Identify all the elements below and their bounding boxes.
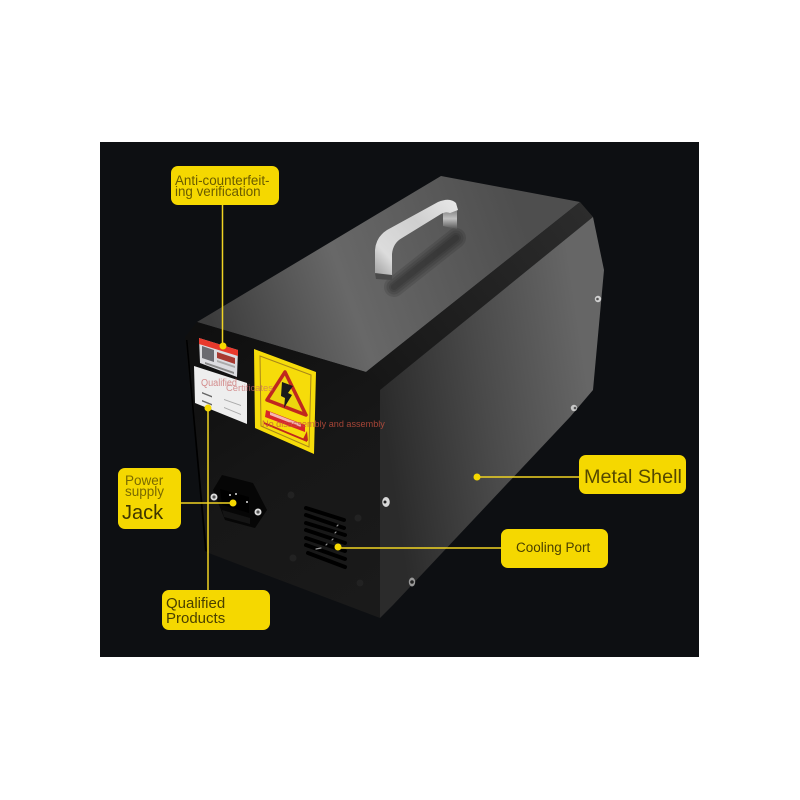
- front face rivets: [288, 492, 364, 586]
- high voltage warning sticker: [254, 349, 316, 454]
- dark background panel: [100, 142, 699, 657]
- callout: Metal Shell: [474, 455, 686, 494]
- callout: Cooling Port: Cooling Port: [516, 540, 591, 555]
- handle strut: [443, 206, 457, 229]
- box side face: [380, 217, 604, 618]
- power socket: [210, 475, 267, 528]
- warning red band: [265, 410, 305, 432]
- anti-counterfeit sticker: [199, 338, 238, 377]
- box left edge: [186, 340, 207, 552]
- handle: [375, 200, 458, 287]
- callout: Metal Shell: Metal Shell: [584, 466, 682, 488]
- handle foot: [375, 273, 392, 280]
- callout: Power supply Jack: [118, 468, 236, 529]
- callout: Qualified Products: Qualified: [166, 595, 225, 612]
- callout: Power supply Jack: Power: [125, 473, 164, 488]
- box top face: [197, 176, 580, 372]
- overlay caption: No disassembly and assembly: No disassembly and assembly: [262, 419, 385, 429]
- callout: Power supply Jack: supply: [125, 484, 164, 499]
- cooling vent: [306, 508, 345, 567]
- callout: Anti-counterfeiting verification: [171, 166, 279, 350]
- lightning bolt: [281, 382, 293, 408]
- box front face: [185, 322, 380, 618]
- callout: Qualified Products: Products: [166, 610, 225, 627]
- handle bar: [375, 200, 458, 276]
- overlay caption: Certificates: Certificates: [226, 382, 273, 393]
- callout: Power supply Jack: Jack: [122, 502, 164, 524]
- callout: Anti-counterfeiting verification: Anti-counterfeit-: [175, 173, 270, 188]
- callout: Anti-counterfeiting verification: ing verification: [175, 184, 261, 199]
- overlay caption: Qualified: Qualified: [201, 378, 237, 389]
- certificate label: [194, 366, 247, 424]
- callout: Cooling Port: [334, 529, 608, 568]
- side screws: [382, 296, 601, 586]
- box chamfer strip: [366, 202, 593, 390]
- callout: Qualified Products: [162, 404, 270, 630]
- handle shadow: [394, 238, 456, 287]
- warning triangle: [267, 372, 306, 415]
- product: metal box: [185, 176, 604, 618]
